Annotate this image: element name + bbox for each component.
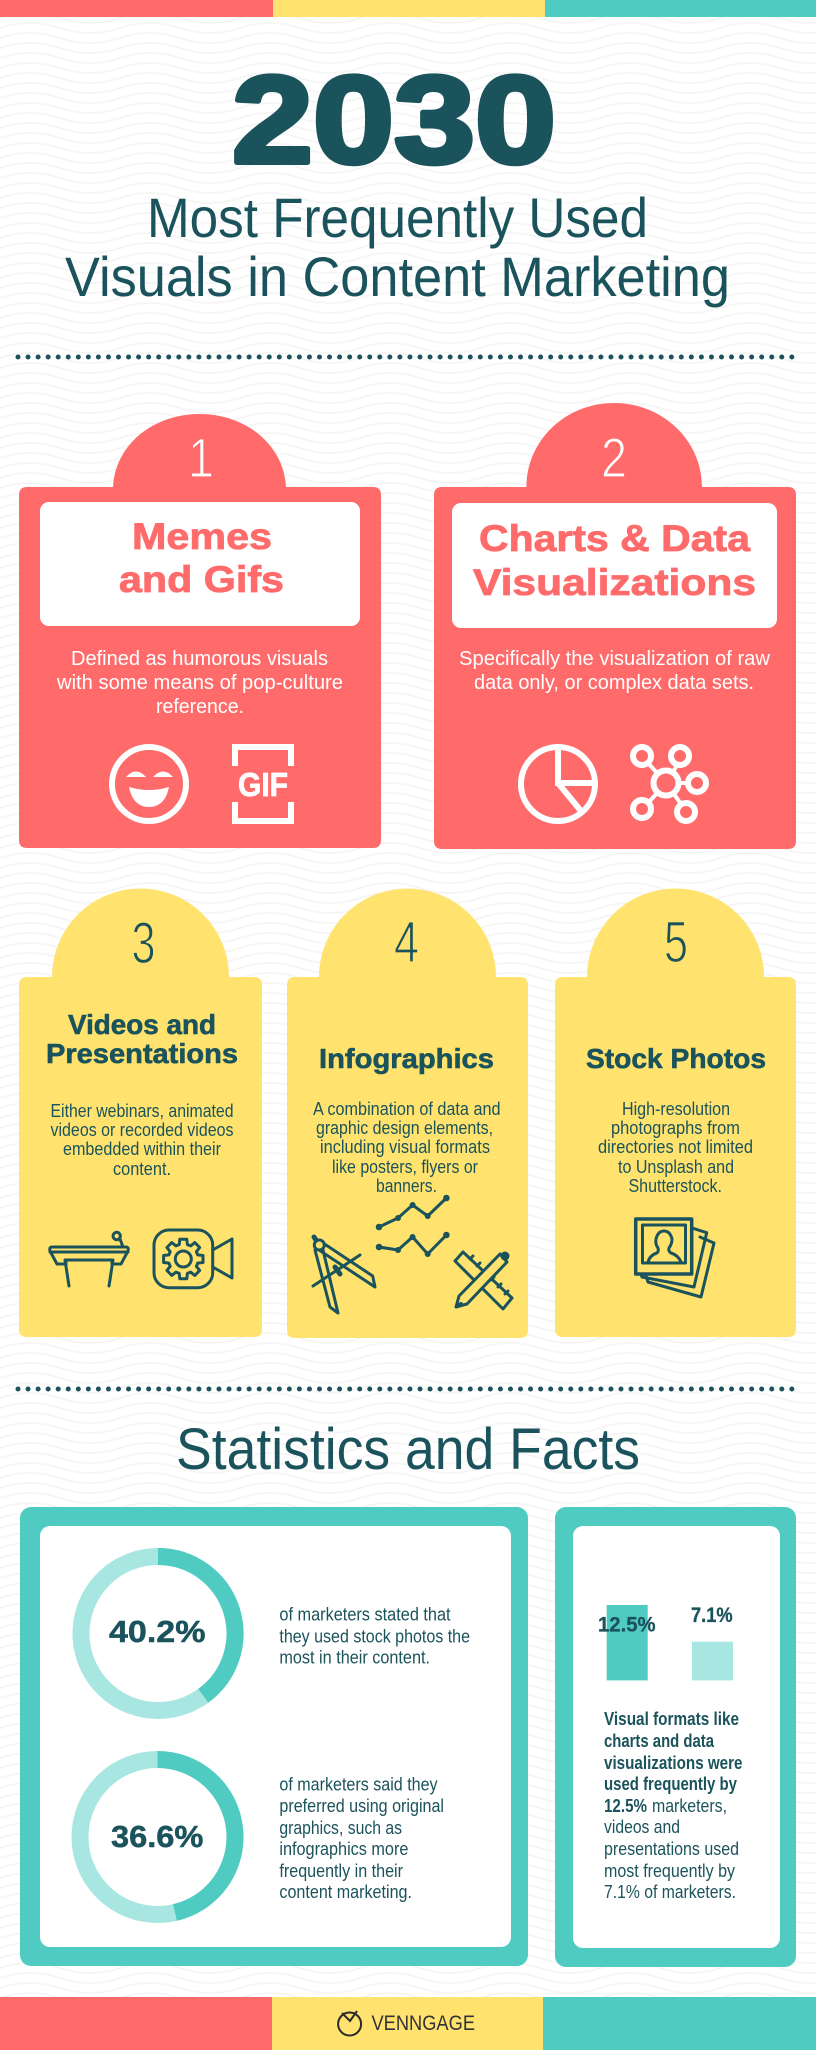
icon: gif frame: GIF (238, 766, 288, 803)
card 5 description: photographs from (611, 1118, 740, 1138)
panel: card 4 infographics (287, 888, 528, 1338)
icon: line charts (376, 1195, 450, 1257)
card 4 description: banners. (376, 1176, 437, 1196)
stat text: original graphics: preferred using original (279, 1795, 444, 1816)
card 2 description: Specifically the visualization of raw (459, 648, 771, 670)
card 1 title box (40, 502, 360, 626)
card 5 description: Shutterstock. (628, 1176, 722, 1196)
card 5 description: High-resolution (622, 1099, 730, 1119)
heading: statistics and facts: Statistics and Facts (176, 1417, 640, 1482)
card 2 title box: Charts & Data (479, 518, 750, 559)
card 3 shape (19, 888, 262, 1337)
card 1 title box: and Gifs (119, 559, 284, 600)
card 5 number: 5 (664, 910, 688, 975)
panel frame (555, 1507, 796, 1967)
card 4 number: 4 (394, 910, 419, 975)
card 2 description: data only, or complex data sets. (474, 672, 754, 694)
card 4 shape (287, 888, 528, 1338)
card 1 description: with some means of pop-culture (56, 672, 343, 694)
card 4 description: graphic design elements, (316, 1118, 493, 1138)
icon: video camera with gear (154, 1230, 232, 1288)
card 5 shape (555, 888, 796, 1337)
icon: podium (50, 1232, 128, 1286)
title: subtitle: Most Frequently Used (147, 186, 648, 249)
card 4 description: A combination of data and (313, 1099, 500, 1119)
card 3 title: Videos and (68, 1009, 216, 1040)
card 2 description (459, 648, 771, 694)
stat text: visual formats: marketers, (652, 1795, 727, 1816)
icon: ruler and pencil (455, 1252, 512, 1309)
icon: stack of photos (636, 1219, 714, 1297)
card 3 title (46, 1009, 238, 1069)
card 2 shape (434, 403, 796, 849)
icon: drawing compass (313, 1237, 375, 1313)
donut chart: 36.6%: 36.6% (111, 1819, 203, 1854)
top colour band (0, 0, 816, 17)
icon: gif frame (235, 747, 291, 821)
stat text: visual formats: 7.1% of marketers. (604, 1881, 736, 1902)
stat text: original graphics: content marketing. (279, 1881, 412, 1902)
title: subtitle (65, 186, 730, 308)
card 1 title box: Memes (132, 516, 272, 557)
card 4 description: including visual formats (320, 1137, 490, 1157)
card 5 description: to Unsplash and (618, 1157, 734, 1177)
bar chart: 12.5% (598, 1614, 656, 1637)
panel: card 3 videos and presentations (19, 888, 262, 1337)
card 3 number: 3 (132, 911, 156, 976)
stat text: stock photos: most in their content. (279, 1647, 430, 1668)
card 3 description (50, 1101, 234, 1179)
stat text: stock photos: of marketers stated that (279, 1604, 451, 1625)
stat text: visual formats: used frequently by (604, 1773, 738, 1794)
stat text: stock photos (279, 1604, 470, 1668)
stat text: visual formats: Visual formats like (604, 1708, 739, 1729)
card 1 description: reference. (156, 696, 244, 718)
panel frame (20, 1507, 528, 1966)
stat text: stock photos: they used stock photos the (279, 1626, 470, 1647)
panel: card 2 charts and data (434, 403, 796, 849)
footer band (0, 1997, 816, 2050)
stat text: visual formats: presentations used (604, 1838, 739, 1859)
title: subtitle: Visuals in Content Marketing (65, 245, 730, 308)
panel: donut statistics (20, 1507, 528, 1966)
card 4 description (313, 1099, 500, 1196)
icon: venngage logo (338, 2011, 361, 2036)
panel: bar statistics (555, 1507, 796, 1967)
card 5 description: directories not limited (598, 1137, 753, 1157)
card 1 description (56, 648, 343, 718)
icon: pie chart (521, 747, 595, 821)
card 5 description (598, 1099, 753, 1196)
stat text: original graphics: infographics more (279, 1838, 408, 1859)
card 2 number: 2 (601, 426, 627, 489)
card 2 title box: Visualizations (473, 562, 756, 603)
card 3 description: Either webinars, animated (50, 1101, 234, 1121)
card 1 shape (19, 414, 381, 848)
card 5 title: Stock Photos (586, 1043, 766, 1074)
bar chart: 7.1% (691, 1604, 733, 1627)
donut chart: 40.2% (81, 1556, 235, 1710)
stat text: original graphics (279, 1774, 444, 1902)
card 1 number: 1 (188, 426, 214, 489)
card 2 title box (452, 503, 777, 628)
stat text: original graphics: graphics, such as (279, 1817, 402, 1838)
donut chart: 40.2%: 40.2% (109, 1614, 206, 1649)
title: year: 2030 (232, 52, 556, 190)
stat text: visual formats (604, 1708, 742, 1902)
stat text: visual formats: most frequently by (604, 1860, 736, 1881)
stat text: original graphics: frequently in their (279, 1860, 403, 1881)
card 3 title: Presentations (46, 1038, 238, 1069)
card 4 title: Infographics (319, 1043, 494, 1074)
donut chart: 36.6% (80, 1760, 235, 1914)
brand name: VENNGAGE (372, 2012, 475, 2035)
stat text: original graphics: of marketers said they (279, 1774, 438, 1794)
panel: card 1 memes and gifs (19, 414, 381, 848)
icon: network nodes (633, 747, 706, 821)
card 1 description: Defined as humorous visuals (71, 648, 328, 670)
panel: card 5 stock photos (555, 888, 796, 1337)
card 4 description: like posters, flyers or (332, 1157, 478, 1177)
stat text: visual formats: 12.5% (604, 1795, 647, 1816)
card 3 description: content. (113, 1159, 171, 1179)
card 3 description: videos or recorded videos (50, 1120, 234, 1140)
stat text: visual formats: videos and (604, 1816, 680, 1837)
stat text: visual formats: charts and data (604, 1730, 715, 1751)
bar chart (598, 1604, 733, 1680)
stat text: visual formats: visualizations were (604, 1752, 742, 1773)
card 3 description: embedded within their (63, 1139, 221, 1159)
icon: laughing face (112, 747, 186, 821)
